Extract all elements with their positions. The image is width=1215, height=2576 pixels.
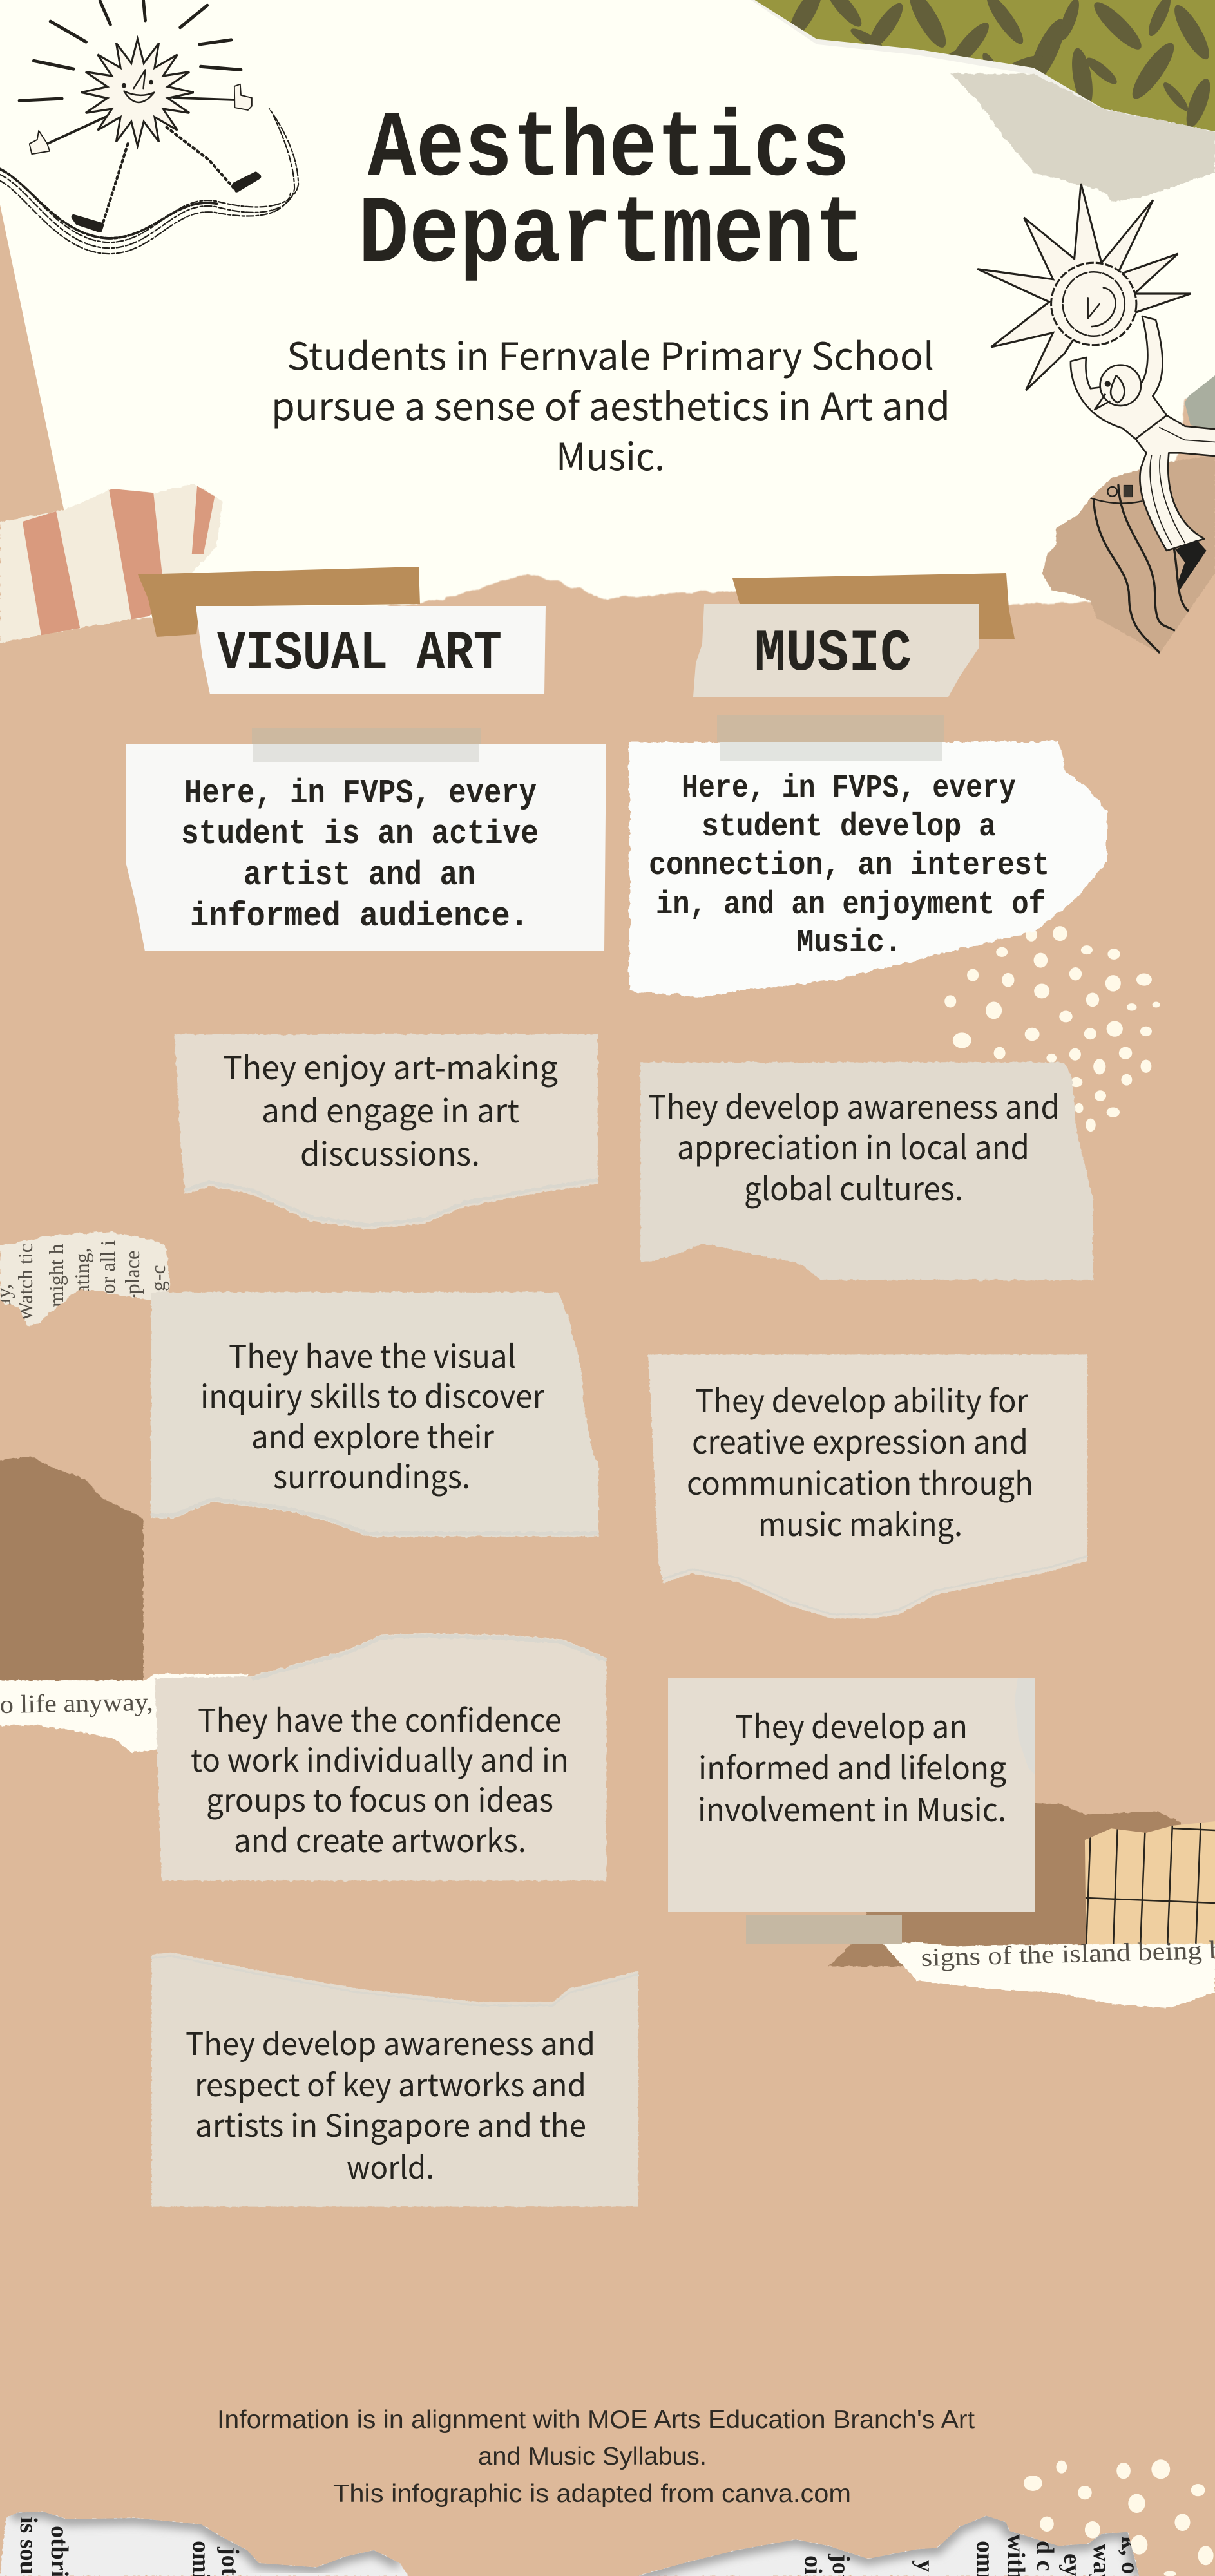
kraft paper, lower right [828,1803,1181,1967]
title: Department [358,182,865,290]
panel: music intro [629,715,1107,996]
tape: visual art heading [138,567,420,637]
panel: develop awareness and appreciation: appreciation in local and [677,1122,1029,1169]
book scrap, left middle: might h [44,1244,68,1307]
tape on art intro [252,728,481,762]
torn grey paper [950,74,1215,202]
music intro text: Music. [796,925,902,961]
panel: they enjoy art-making: and engage in art [262,1086,519,1132]
music intro text [649,770,1049,961]
torn newspaper, bottom right: d c [1031,2541,1058,2571]
heading: visual art: VISUAL ART [217,623,502,685]
art intro text: Here, in FVPS, every [184,774,537,813]
art intro text: informed audience. [190,897,529,936]
torn newspaper, bottom right: y [912,2560,939,2572]
panel: creative expression [648,1354,1087,1618]
limbs [30,84,259,230]
swoosh [0,109,298,254]
music intro text: connection, an interest [649,848,1049,884]
footer text: This infographic is adapted from canva.com [333,2480,851,2508]
art intro text: student is an active [181,815,539,853]
music intro text: student develop a [702,809,996,846]
book scrap, left middle: rating, [70,1247,93,1301]
panel: confidence: to work individually and in [191,1736,569,1781]
sun face [122,70,154,102]
panel: creative expression: creative expression and [692,1417,1028,1463]
music intro text: in, and an enjoyment of [656,887,1046,923]
panel: creative expression: music making. [758,1500,962,1546]
striped torn paper [0,480,223,644]
panel: key artworks: They develop awareness and [186,2019,595,2064]
book scrap, left middle: big-c [146,1265,169,1307]
panel: visual inquiry skills: surroundings. [273,1452,470,1498]
book scrap: signs of the island [883,1935,1215,2008]
tape: music heading [732,573,1015,639]
title [358,97,865,290]
star face [1051,263,1136,345]
arms and body [1071,316,1215,591]
torn newspaper, bottom left: jot [216,2546,244,2576]
panel: visual inquiry skills: They have the visual [229,1332,516,1378]
panel: confidence: and create artworks. [234,1816,526,1862]
art intro text [181,774,539,936]
intro text: Students in Fernvale Primary School [287,327,934,381]
intro text: Music. [556,427,665,481]
torn newspaper, bottom left: is sou [15,2517,42,2575]
book scrap, left middle: Watch tic [14,1244,37,1321]
title: Aesthetics [368,97,850,203]
cream torn header paper [0,0,1215,618]
brown kraft paper, left [0,1456,144,1680]
star burst [977,184,1191,390]
panel: key artworks: respect of key artworks and [195,2060,586,2105]
music intro text: Here, in FVPS, every [682,770,1016,807]
tape under lifelong card [746,1915,902,1944]
olive leaf paper, top right [747,0,1215,142]
intro text [271,327,950,481]
panel: creative expression: They develop ability for [695,1376,1029,1422]
tape on music intro [717,715,944,761]
footer text [217,2406,975,2508]
footer text: Information is in alignment with MOE Arts Education Branch's Art [217,2406,975,2434]
footer text: and Music Syllabus. [478,2443,707,2470]
panel: they enjoy art-making [175,1034,598,1229]
panel: lifelong involvement: informed and lifelong [698,1743,1006,1789]
torn newspaper, bottom right [638,2516,1143,2576]
book scrap: life anyway: o life anyway, [0,1687,153,1719]
icon: star figure with bird head [977,184,1215,591]
panel: visual inquiry skills [151,1292,598,1537]
panel: confidence: groups to focus on ideas [206,1776,553,1821]
panel: confidence [155,1633,606,1880]
torn newspaper, bottom left [0,2512,408,2576]
panel: lifelong involvement: They develop an [735,1702,968,1748]
heading: visual art [196,606,546,694]
panel: they enjoy art-making: They enjoy art-making [223,1043,558,1089]
panel: they enjoy art-making: discussions. [300,1129,480,1175]
torn newspaper, bottom right: k, o [1116,2536,1143,2574]
book scrap: signs of the island: signs of the island being b [921,1935,1215,1972]
book scrap, left middle: r-place [120,1251,144,1307]
book scrap, left middle [0,1231,171,1327]
panel: visual inquiry skills: and explore their [251,1412,495,1458]
brown crumpled paper with wavy lines [1042,455,1215,654]
sun rays [19,0,241,100]
grid paper scrap [1084,1819,1215,1948]
heading: music [693,604,979,697]
panel: develop awareness and appreciation [640,1062,1093,1280]
panel: lifelong involvement [668,1678,1035,1912]
decorative dots, bottom right [1024,2459,1214,2576]
sun body [81,39,194,146]
panel: key artworks: world. [347,2143,434,2188]
intro text: pursue a sense of aesthetics in Art and [271,377,950,431]
panel: creative expression: communication through [687,1459,1033,1504]
panel: key artworks [151,1953,638,2207]
decorative dots, middle right [944,926,1160,1132]
panel: visual inquiry skills: inquiry skills to discover [200,1372,545,1417]
icon: smiling sun figure [0,0,298,254]
art intro text: artist and an [244,856,475,895]
speckled rock scrap [1185,375,1215,430]
book scrap: life anyway [0,1674,248,1752]
panel: develop awareness and appreciation: global cultures. [744,1164,963,1210]
torn newspaper, bottom right: ey [1058,2553,1086,2576]
heading: music: MUSIC [754,620,912,688]
book scrap, left middle: for all i [96,1240,119,1301]
panel: lifelong involvement: involvement in Music. [698,1785,1006,1831]
torn newspaper, bottom right: oi [799,2555,827,2575]
panel: develop awareness and appreciation: They develop awareness and [648,1082,1060,1128]
panel: visual art intro [126,728,606,951]
panel: confidence: They have the confidence [198,1696,562,1741]
panel: key artworks: artists in Singapore and the [195,2101,586,2146]
